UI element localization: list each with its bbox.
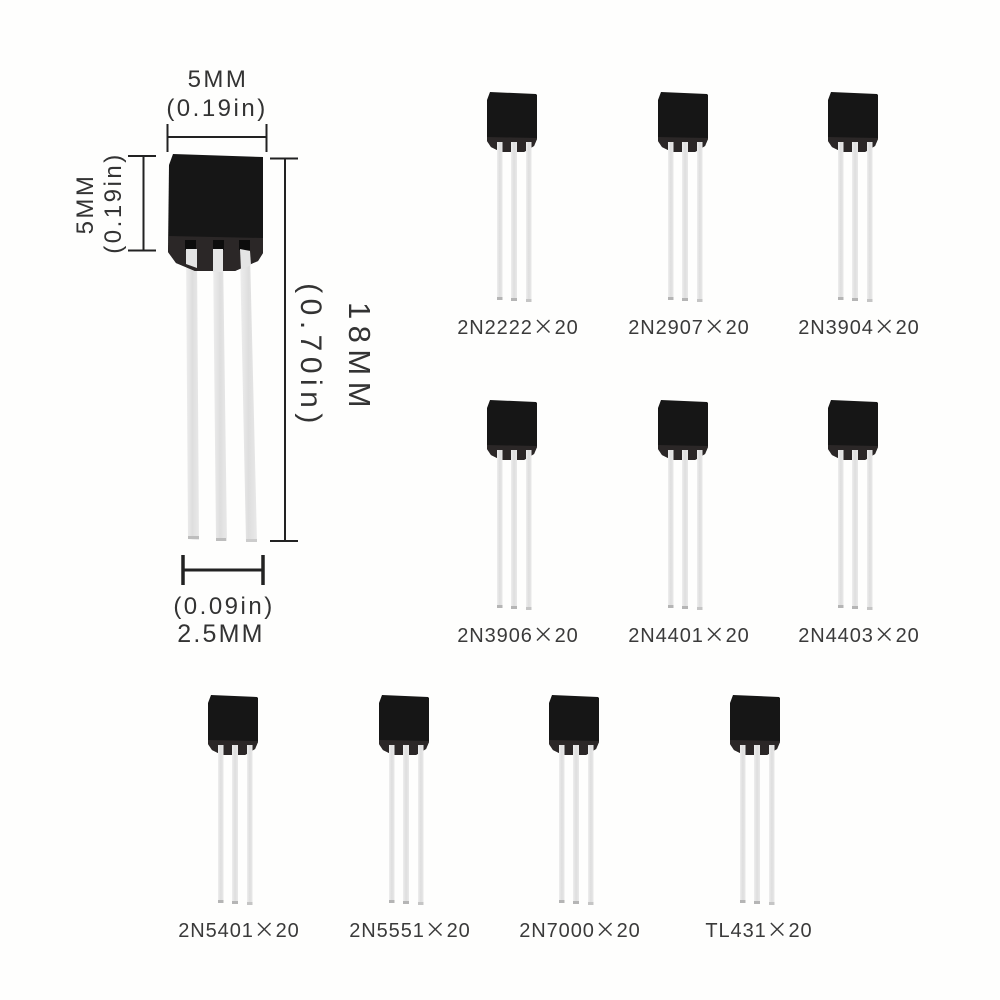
panel: large transistor with dimensions [72,66,377,648]
transistor 2N7000: 2N7000×20 [519,914,641,944]
dimension: top width: 5MM [188,66,248,93]
transistor 2N3904: 2N3904×20 [798,311,920,341]
transistor 2N3904 [798,92,920,341]
transistor 2N4403 [798,400,920,649]
transistor 2N3906: 2N3906×20 [457,619,579,649]
dimension: lead pitch: (0.09in) [173,593,275,620]
dimension: total length [270,158,377,541]
large transistor [168,154,263,542]
transistor TL431 [705,695,813,944]
transistor 2N2907 [628,92,750,341]
transistor 2N4403: 2N4403×20 [798,619,920,649]
dimension: total length: (0.70in) [294,283,327,429]
transistor 2N4401: 2N4401×20 [628,619,750,649]
transistor 2N2222 [457,92,579,341]
transistor 2N4401 [628,400,750,649]
dimension: left height [72,152,156,254]
transistor 2N5401: 2N5401×20 [178,914,300,944]
transistor 2N7000 [519,695,641,944]
transistor 2N5551: 2N5551×20 [349,914,471,944]
transistor 2N2222: 2N2222×20 [457,311,579,341]
dimension: total length: 18MM [342,302,377,414]
transistor 2N5401 [178,695,300,944]
dimension: top width [166,66,268,152]
transistor 2N2907: 2N2907×20 [628,311,750,341]
dimension: lead pitch [173,555,275,648]
dimension: left height: 5MM [72,174,99,234]
transistor 2N3906 [457,400,579,649]
dimension: top width: (0.19in) [166,95,268,122]
transistor TL431: TL431×20 [705,914,813,944]
dimension: left height: (0.19in) [100,152,127,254]
transistor 2N5551 [349,695,471,944]
dimension: lead pitch: 2.5MM [177,620,265,648]
